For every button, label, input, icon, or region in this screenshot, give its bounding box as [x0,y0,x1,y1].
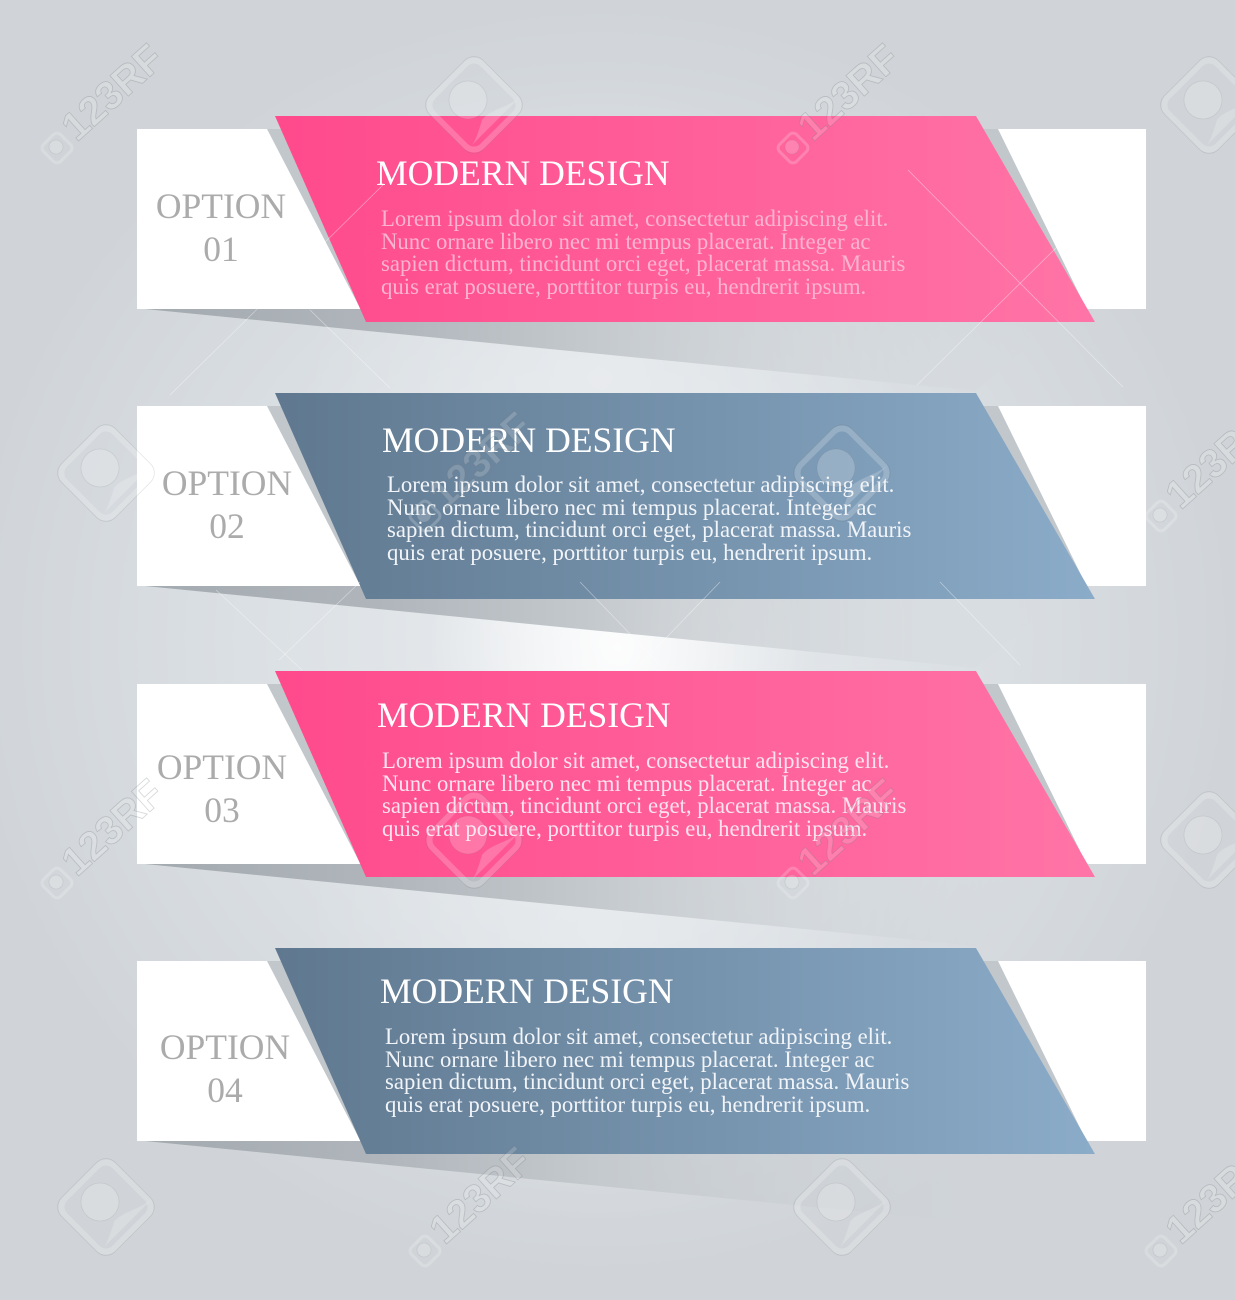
body text 2 [387,472,911,565]
ribbon shadow 2 [145,586,1060,668]
pink ribbon 1 [275,116,1095,322]
body text 1: Lorem ipsum dolor sit amet, consectetur adipiscing elit. [381,206,888,231]
option block 3 [137,671,1146,946]
white card 2 [137,406,1146,586]
option number 4: 04 [207,1070,243,1110]
heading 2: MODERN DESIGN [382,420,676,460]
watermarks: 123RF [789,771,908,884]
body text 4 [385,1024,909,1117]
ribbon shadow 1 [145,309,1060,391]
fold shadows 2 [267,406,1088,589]
option label 2: OPTION [162,463,292,503]
white card 4 [137,961,1146,1141]
body text 3: sapien dictum, tincidunt orci eget, placerat massa. Mauris [382,793,906,818]
body text 3 [382,748,906,841]
body text 4: sapien dictum, tincidunt orci eget, placerat massa. Mauris [385,1069,909,1094]
option label 1: OPTION [156,186,286,226]
heading 3: MODERN DESIGN [377,695,671,735]
heading 1: MODERN DESIGN [376,153,670,193]
option number 3: 03 [204,790,240,830]
watermarks: 123RF [53,36,172,149]
body text 1: Nunc ornare libero nec mi tempus placerat. Integer ac [381,229,871,254]
body text 3: Lorem ipsum dolor sit amet, consectetur adipiscing elit. [382,748,889,773]
pink ribbon 3 [275,671,1095,877]
heading 4: MODERN DESIGN [380,971,674,1011]
blue ribbon 4 [275,948,1095,1154]
body text 1: sapien dictum, tincidunt orci eget, placerat massa. Mauris [381,251,905,276]
option label 4: OPTION [160,1027,290,1067]
body text 2: sapien dictum, tincidunt orci eget, placerat massa. Mauris [387,517,911,542]
option block 4 [137,948,1146,1223]
body text 2: Lorem ipsum dolor sit amet, consectetur adipiscing elit. [387,472,894,497]
fold shadows 3 [267,684,1088,867]
white card 3 [137,684,1146,864]
option block 1 [137,116,1146,391]
body text 2: Nunc ornare libero nec mi tempus placerat. Integer ac [387,495,877,520]
blue ribbon 2 [275,393,1095,599]
fold shadows 1 [267,129,1088,312]
watermarks: 123RF [789,36,908,149]
ribbon shadow 3 [145,864,1060,946]
body text 2: quis erat posuere, porttitor turpis eu, hendrerit ipsum. [387,540,872,565]
watermarks: 123RF [421,1139,540,1252]
body text 1 [381,206,905,299]
option label 3: OPTION [157,747,287,787]
body text 3: quis erat posuere, porttitor turpis eu, hendrerit ipsum. [382,816,867,841]
body text 4: Lorem ipsum dolor sit amet, consectetur adipiscing elit. [385,1024,892,1049]
white card 1 [137,129,1146,309]
watermarks: 123RF [53,771,172,884]
body text 3: Nunc ornare libero nec mi tempus placerat. Integer ac [382,771,872,796]
option number 2: 02 [209,506,245,546]
body text 4: quis erat posuere, porttitor turpis eu, hendrerit ipsum. [385,1092,870,1117]
body text 1: quis erat posuere, porttitor turpis eu, hendrerit ipsum. [381,274,866,299]
watermarks: 123RF [421,404,540,517]
fold shadows 4 [267,961,1088,1144]
body text 4: Nunc ornare libero nec mi tempus placerat. Integer ac [385,1047,875,1072]
option block 2 [137,393,1146,668]
option number 1: 01 [203,229,239,269]
ribbon shadow 4 [145,1141,1060,1223]
